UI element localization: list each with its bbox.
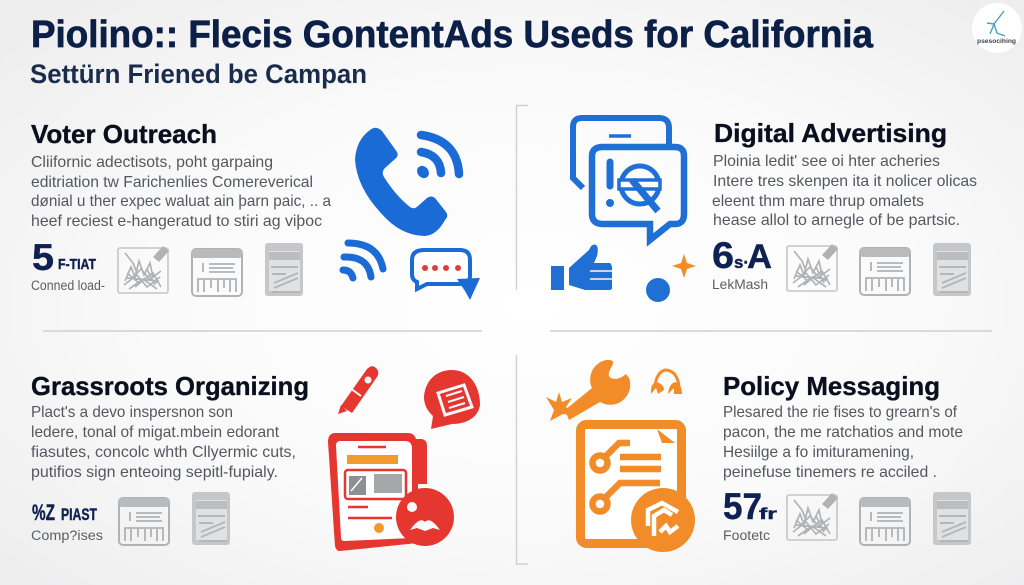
stat: voter outreach: Conned load-	[31, 278, 105, 293]
stat: voter outreach	[31, 237, 105, 293]
icon: red document	[328, 433, 427, 551]
thumbnail: sketch	[787, 244, 838, 291]
text block: policy messaging: Hesiilge a fo imituramening,	[723, 444, 914, 461]
stat: policy messaging: fr	[759, 506, 777, 523]
icon: wrench and star	[546, 360, 630, 421]
stat: digital advertising: A	[747, 238, 772, 276]
text block: grassroots organizing: Plact's a devo inspersnon son	[31, 404, 233, 421]
text block: grassroots organizing: fiasutes, concolc whth Cllyermic cuts,	[31, 444, 296, 461]
icon: orange document	[580, 424, 682, 544]
title: Piolino:: Flecis GontentAds Useds for California	[31, 14, 874, 56]
text block: policy messaging	[723, 404, 963, 481]
thumbnail: phone	[192, 492, 230, 545]
text block: policy messaging: Plesared the rie fises to grearn's of	[723, 404, 958, 421]
stat: grassroots organizing	[31, 500, 103, 543]
logo badge: psesocihing	[977, 39, 1016, 45]
dividers	[43, 106, 992, 564]
thumbnail: phone	[933, 243, 971, 296]
panel: policy messaging	[546, 360, 971, 552]
stat: digital advertising: s·	[734, 253, 749, 272]
text block: policy messaging: peinefuse tinemers re acciled .	[723, 464, 937, 481]
heading: grassroots organizing: Grassroots Organizing	[31, 371, 309, 401]
thumbnail: phone	[933, 492, 971, 545]
thumbnail: sketch	[118, 246, 169, 293]
stat: digital advertising: 6	[712, 235, 734, 276]
panel: digital advertising	[551, 118, 977, 302]
icon: red marker	[338, 366, 378, 414]
stat: digital advertising: LekMash	[712, 277, 768, 292]
icon: ad bubbles	[573, 118, 684, 240]
stat: policy messaging: 57	[723, 486, 762, 527]
icon: small signal	[343, 243, 383, 278]
heading: voter outreach: Voter Outreach	[31, 119, 217, 149]
stat: voter outreach: F-TIAT	[58, 256, 96, 273]
stat: policy messaging: Footetc	[723, 528, 770, 543]
panel: voter outreach	[31, 119, 480, 300]
logo badge	[972, 3, 1022, 53]
text block: digital advertising: Ploinia ledit' see oi hter acheries	[713, 153, 940, 170]
text block: digital advertising: Intere tres skenpen ita it nolicer olicas	[713, 173, 977, 190]
icon: thumbs up	[551, 245, 612, 290]
stat: policy messaging	[723, 486, 777, 543]
stat: voter outreach: 5	[32, 237, 54, 278]
text block: voter outreach: heef reciest e-hangeratud to stiri ag viþoc	[31, 213, 322, 230]
heading: digital advertising: Digital Advertising	[714, 118, 947, 148]
text block: voter outreach: editriation tw Farichenlies Comereverical	[31, 174, 313, 191]
stat: digital advertising	[712, 235, 772, 292]
icon: red face	[396, 488, 454, 546]
thumbnail: window	[860, 498, 910, 545]
thumbnail: window	[860, 248, 910, 295]
icon: orange sparkle	[672, 254, 696, 278]
text block: voter outreach	[31, 154, 331, 230]
icon: orange circle badge	[631, 488, 695, 552]
text block: voter outreach: Cliifornic adectisots, poht garpaing	[31, 154, 273, 171]
icon: phone	[355, 128, 447, 236]
thumbnail: window	[119, 498, 169, 545]
icon: phone signal	[417, 135, 459, 178]
text block: policy messaging: pacon, the me ratchatios and mote	[723, 424, 963, 441]
icon: blue dot	[646, 278, 670, 302]
text block: digital advertising: eleent thm mare thrup omalets	[712, 193, 924, 210]
stat: grassroots organizing: %Z	[32, 500, 55, 525]
text block: voter outreach: dønial u ther expec waluat ain þarn paic, .. a	[31, 193, 331, 210]
heading: policy messaging: Policy Messaging	[723, 371, 940, 401]
text block: grassroots organizing	[31, 404, 296, 481]
icon: red speech bubble	[424, 370, 480, 429]
thumbnail: window	[192, 249, 242, 296]
text block: digital advertising	[712, 153, 977, 229]
text block: grassroots organizing: ledere, tonal of migat.mbein edorant	[31, 424, 280, 441]
text block: grassroots organizing: putifios sign enteoing sepitl-fupialy.	[31, 464, 278, 481]
stat: grassroots organizing: Comp?ises	[31, 528, 103, 543]
icon: chat bubble	[412, 250, 480, 300]
thumbnail: sketch	[787, 493, 838, 540]
thumbnail: phone	[265, 243, 303, 296]
icon: headphones	[651, 370, 682, 394]
panel: grassroots organizing	[31, 366, 480, 551]
stat: grassroots organizing: PIAST	[61, 505, 97, 524]
subtitle: Settürn Friened be Campan	[30, 59, 367, 89]
text block: digital advertising: hease allol to arnegle of be partsic.	[713, 212, 960, 229]
